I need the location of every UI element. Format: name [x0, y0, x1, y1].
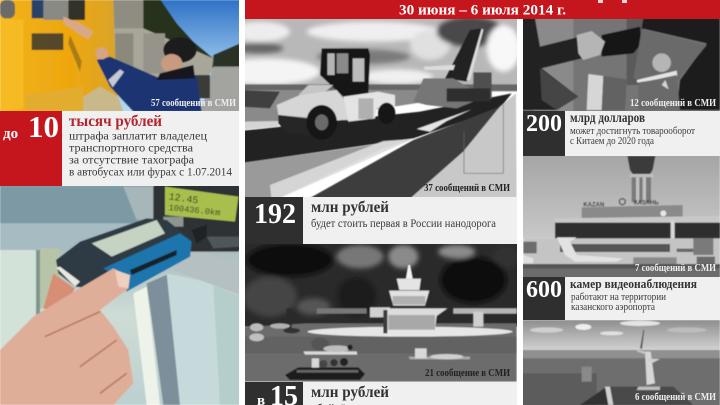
number block: 200 — [526, 111, 562, 137]
description: за отсутствие тахографа — [69, 154, 194, 166]
heading: млн рублей — [311, 384, 389, 401]
media count: 37 сообщений в СМИ — [424, 183, 510, 194]
number block: 600 — [526, 277, 562, 303]
heading: млн рублей — [311, 199, 389, 216]
heading: тысяч рублей — [69, 113, 162, 130]
photo: Motherland Calls statue over the city — [520, 320, 720, 405]
description: может достигнуть товарооборот — [570, 126, 695, 137]
photo: handshake and flags — [520, 17, 720, 113]
number block: до — [3, 126, 18, 142]
media count: 21 сообщение в СМИ — [425, 368, 510, 379]
description: работают на территории — [571, 292, 666, 303]
text panel background — [303, 382, 517, 405]
heading: камер видеонаблюдения — [570, 276, 697, 291]
number block: 192 — [254, 199, 296, 230]
description — [570, 126, 695, 147]
description: транспортного средства — [69, 142, 193, 154]
number block — [245, 381, 303, 405]
photo: tachograph reader in hand: 100436.0km — [168, 203, 221, 218]
panel: Volgograd — [520, 320, 720, 405]
number block — [0, 109, 62, 186]
number block: 10 — [28, 109, 59, 144]
heading: млрд долларов — [570, 110, 645, 125]
number block — [523, 111, 565, 156]
photo: park with fountain — [240, 240, 525, 382]
photo: truck and traffic officer — [0, 0, 240, 112]
number block — [245, 197, 303, 244]
panel: tachograph fine — [0, 0, 240, 405]
description: казанского аэропорта — [571, 302, 655, 313]
panel: nano road — [245, 19, 517, 244]
text panel background — [62, 111, 239, 186]
date range: 30 июня – 6 июля 2014 г. — [399, 2, 566, 18]
text panel background — [565, 111, 720, 156]
header bar — [245, 0, 720, 19]
description: в автобусах или фурах с 1.07.2014 — [69, 166, 232, 178]
photo: tachograph reader in hand: 12.45 — [168, 191, 199, 206]
description — [69, 130, 232, 178]
photo: tachograph reader in hand — [0, 180, 240, 405]
photo: road roller and paver — [245, 19, 517, 197]
photo: Kazan airport terminal: КАЗАНЬ — [634, 201, 659, 207]
description: будет стоить первая в России нанодорога — [311, 218, 496, 230]
text panel background — [303, 197, 517, 244]
panel: Kazan airport — [520, 155, 720, 320]
text panel background — [565, 277, 720, 320]
photo: Kazan airport terminal — [520, 155, 720, 282]
media count: 57 сообщений в СМИ — [151, 98, 236, 109]
panel: China trade — [520, 17, 720, 156]
description — [571, 292, 666, 313]
number block — [523, 277, 565, 320]
panel: fountain park — [240, 240, 525, 405]
photo: Kazan airport terminal: KAZAN — [583, 203, 604, 209]
description: штрафа заплатит владелец — [69, 130, 207, 142]
description: с Китаем до 2020 года — [570, 136, 654, 147]
